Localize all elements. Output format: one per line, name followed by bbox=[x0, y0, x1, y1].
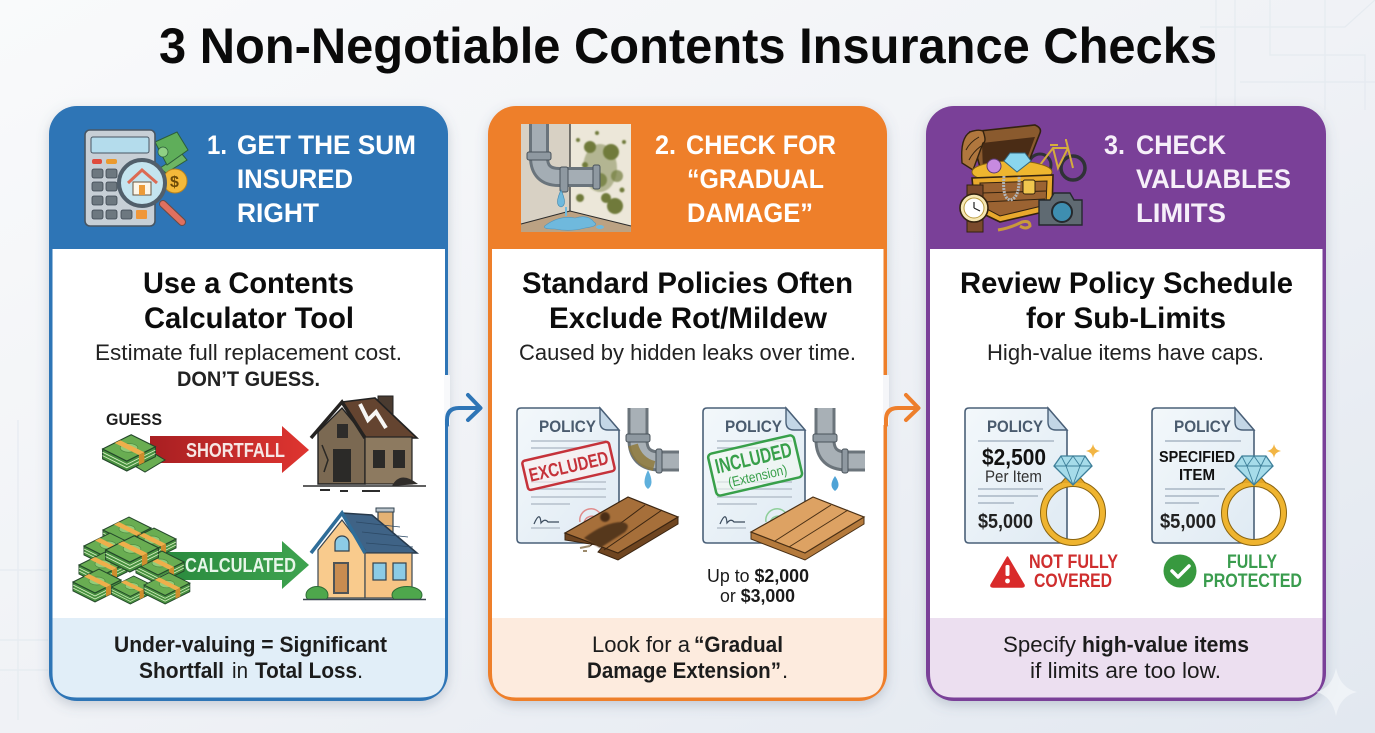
arrow: shortfall: SHORTFALL bbox=[186, 440, 285, 462]
arrow: card 2 to card 3 bbox=[886, 395, 918, 425]
footer note: Look for a bbox=[592, 632, 691, 657]
icon: small money stack bbox=[103, 435, 165, 472]
heading: 2. bbox=[655, 130, 676, 160]
policy: per item limit: POLICY bbox=[987, 417, 1044, 436]
heading: RIGHT bbox=[237, 198, 319, 228]
status: not fully covered bbox=[991, 552, 1118, 592]
footer note: Total Loss bbox=[255, 658, 357, 683]
subheading: Calculator Tool bbox=[144, 302, 354, 335]
icon: diamond ring bbox=[1224, 444, 1284, 542]
icon: leaking pipe and mold bbox=[521, 124, 631, 232]
subheading: Exclude Rot/Mildew bbox=[549, 302, 828, 335]
icon: sound planks bbox=[751, 497, 864, 560]
coverage amount: Up to $2,000 bbox=[707, 566, 810, 586]
heading: “GRADUAL bbox=[687, 164, 824, 194]
policy: specified item: ITEM bbox=[1179, 467, 1215, 484]
icon: rusty pipe bbox=[626, 408, 679, 489]
stamp: excluded: EXCLUDED bbox=[527, 448, 611, 487]
panel: valuables limits bbox=[926, 106, 1326, 701]
stamp: included bbox=[707, 435, 803, 496]
description: High-value items have caps. bbox=[987, 340, 1264, 365]
stamp: included: (Extension) bbox=[726, 461, 789, 490]
icon: diamond ring bbox=[1044, 444, 1102, 542]
heading: DAMAGE” bbox=[687, 198, 813, 228]
icon: calculator with magnifier: $ bbox=[170, 174, 179, 191]
stamp: included: INCLUDED bbox=[713, 439, 794, 479]
coverage amount: or $3,000 bbox=[720, 586, 796, 606]
status: not fully covered: COVERED bbox=[1034, 571, 1112, 592]
footer note: Shortfall bbox=[139, 658, 224, 683]
arrow: shortfall bbox=[150, 426, 309, 473]
arrow: calculated bbox=[165, 541, 309, 589]
policy: per item limit bbox=[965, 408, 1102, 543]
arrow: calculated: CALCULATED bbox=[185, 555, 296, 577]
panel frame bbox=[926, 106, 1326, 701]
panel: gradual damage bbox=[488, 106, 889, 701]
status: fully protected bbox=[1164, 552, 1302, 592]
policy: per item limit: $2,500 bbox=[982, 444, 1046, 470]
subheading: Standard Policies Often bbox=[522, 267, 853, 300]
panel: sum insured bbox=[49, 106, 450, 701]
status: fully protected: FULLY bbox=[1227, 552, 1277, 573]
status: fully protected: PROTECTED bbox=[1203, 571, 1302, 592]
footer note: if limits are too low. bbox=[1030, 658, 1221, 683]
icon: calculator with magnifier bbox=[85, 130, 188, 226]
footer note: Damage Extension” bbox=[587, 658, 781, 683]
icon: sound pipe bbox=[813, 408, 865, 491]
label: guess: GUESS bbox=[106, 410, 162, 429]
title: 3 Non-Negotiable Contents Insurance Checks bbox=[159, 18, 1217, 74]
footer note: high-value items bbox=[1082, 632, 1249, 657]
footer note: Under-valuing = Significant bbox=[114, 632, 388, 657]
arrow: card 1 to card 2 bbox=[447, 395, 480, 425]
heading: INSURED bbox=[237, 164, 353, 194]
heading: 3. bbox=[1104, 130, 1125, 160]
description: Estimate full replacement cost. bbox=[95, 340, 402, 365]
icon: large money stack bbox=[73, 517, 190, 604]
policy: per item limit: $5,000 bbox=[978, 511, 1033, 533]
icon: damaged house bbox=[303, 396, 426, 491]
subheading: for Sub-Limits bbox=[1026, 302, 1226, 335]
icon: treasure chest bbox=[960, 125, 1085, 232]
footer note: “Gradual bbox=[694, 632, 783, 657]
footer note: in bbox=[232, 658, 248, 683]
policy: specified item: SPECIFIED bbox=[1159, 449, 1235, 466]
policy: excluded: POLICY bbox=[539, 417, 597, 436]
heading: LIMITS bbox=[1136, 198, 1226, 228]
policy: specified item: $5,000 bbox=[1160, 511, 1216, 533]
watermark sparkle bbox=[1316, 668, 1357, 716]
footer note: Specify bbox=[1003, 632, 1076, 657]
heading: CHECK FOR bbox=[686, 130, 836, 160]
status: not fully covered: NOT FULLY bbox=[1029, 552, 1118, 573]
footer note: . bbox=[357, 658, 363, 683]
policy: excluded bbox=[517, 408, 679, 560]
icon: rotten planks bbox=[565, 497, 678, 560]
icon: intact house bbox=[300, 508, 428, 605]
panel frame bbox=[488, 106, 889, 701]
heading: 1. bbox=[207, 130, 227, 160]
heading: CHECK bbox=[1136, 130, 1226, 160]
subheading: Use a Contents bbox=[143, 267, 354, 300]
footer note: . bbox=[782, 658, 788, 683]
panel frame bbox=[49, 106, 450, 701]
heading: GET THE SUM bbox=[237, 130, 416, 160]
description: Caused by hidden leaks over time. bbox=[519, 340, 856, 365]
policy: included bbox=[703, 408, 865, 606]
policy: per item limit: Per Item bbox=[985, 467, 1042, 486]
subheading: Review Policy Schedule bbox=[960, 267, 1293, 300]
policy: specified item bbox=[1152, 408, 1284, 543]
policy: specified item: POLICY bbox=[1174, 417, 1232, 436]
description: DON’T GUESS. bbox=[177, 368, 320, 391]
policy: included: POLICY bbox=[725, 417, 783, 436]
heading: VALUABLES bbox=[1136, 164, 1291, 194]
